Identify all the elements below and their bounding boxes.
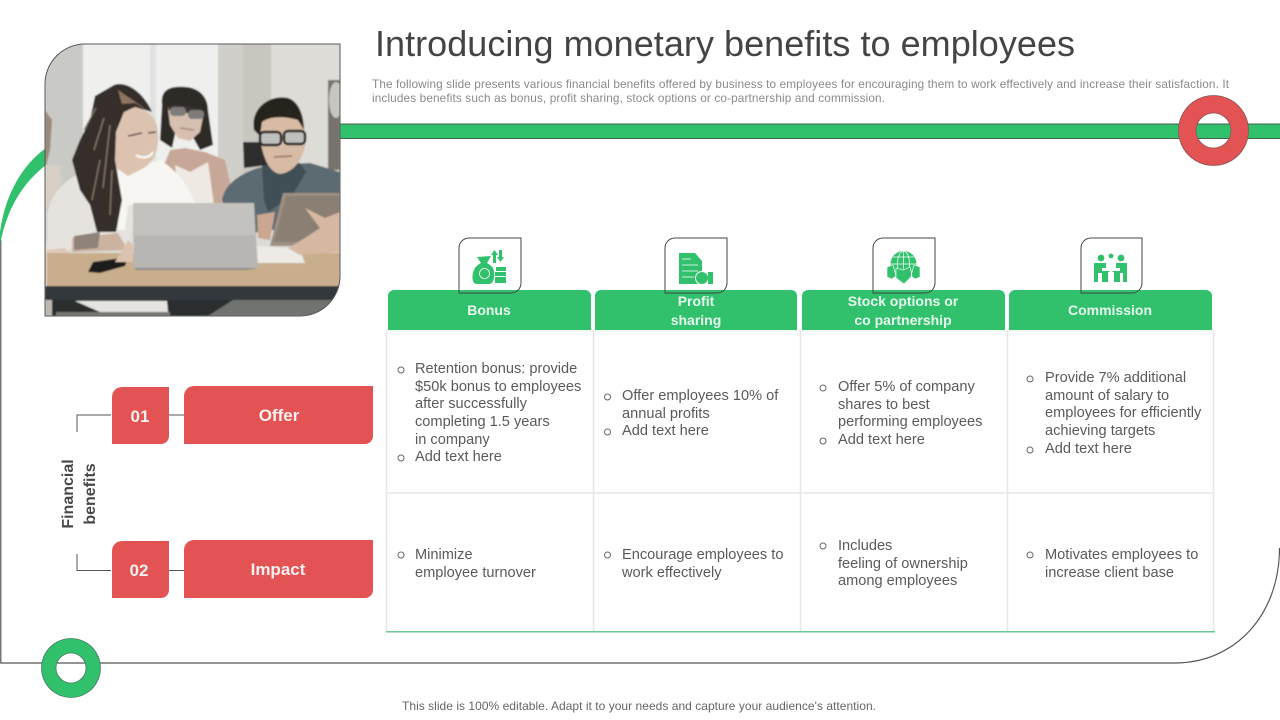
subtitle text: includes benefits such as bonus, profit sharing, stock options or co-partnership and commission.: [372, 91, 885, 105]
green header band: [340, 124, 1280, 138]
cell: bonus offer: [398, 361, 581, 465]
cell: commission impact: [1027, 547, 1198, 581]
background frame outline: [1, 240, 1279, 663]
cell: stock options impact: feeling of ownership: [838, 556, 968, 572]
cell: profit sharing offer: Add text here: [622, 423, 709, 439]
cell: commission offer: amount of salary to: [1045, 388, 1169, 404]
cell: stock options offer: performing employees: [838, 414, 982, 430]
column header: Stock options or co partnership: [802, 290, 1005, 330]
row badge 02: [112, 541, 169, 598]
cell: stock options offer: Offer 5% of company: [838, 379, 976, 395]
cell: stock options impact: [820, 538, 968, 589]
cell: bonus impact: [398, 547, 536, 581]
photo outline: [45, 44, 340, 316]
icon: document with coins: [665, 238, 727, 293]
cell: commission offer: Add text here: [1045, 441, 1132, 457]
cell: stock options impact: Includes: [838, 538, 892, 554]
cell: stock options impact: among employees: [838, 573, 957, 589]
cell: profit sharing impact: [604, 547, 783, 581]
cell: stock options offer: Add text here: [838, 432, 925, 448]
icon: money bag and coins: [459, 238, 521, 293]
cell: stock options offer: [820, 379, 982, 448]
subtitle text: The following slide presents various financial benefits offered by business to employees for encouraging them to work effectively and increase their satisfaction. It: [372, 77, 1230, 91]
row label: Offer: Offer: [259, 406, 300, 425]
icon: globe and handshake: [873, 238, 935, 293]
cell: profit sharing offer: Offer employees 10% of: [622, 388, 779, 404]
photo: team around a laptop: [45, 44, 343, 316]
column header: Stock options or co partnership: Stock options or: [848, 293, 959, 309]
title: Introducing monetary benefits to employees: [375, 23, 1075, 64]
row badge 01: 01: [131, 407, 149, 426]
row label: Impact: [184, 540, 373, 598]
column header: Commission: Commission: [1068, 302, 1152, 318]
cell: bonus offer: Add text here: [415, 449, 502, 465]
cell: profit sharing impact: Encourage employees to: [622, 547, 783, 563]
footer note: This slide is 100% editable. Adapt it to your needs and capture your audience's attention.: [402, 699, 876, 713]
row badge 01: [112, 387, 169, 444]
cell: profit sharing offer: [604, 388, 779, 439]
green ring on frame line: [42, 638, 101, 698]
cell: bonus impact: employee turnover: [415, 565, 536, 581]
vertical label: financial benefits: [60, 459, 99, 529]
red ring on header band: [1179, 96, 1249, 165]
cell: bonus offer: $50k bonus to employees: [415, 379, 581, 395]
vertical label: financial benefits: benefits: [82, 463, 99, 525]
subtitle text: [372, 77, 1230, 105]
cell: bonus offer: in company: [415, 432, 490, 448]
column header: Bonus: [388, 290, 591, 330]
vertical label: financial benefits: Financial: [60, 459, 77, 529]
cell: bonus impact: Minimize: [415, 547, 473, 563]
row label: Offer: [184, 386, 373, 444]
cell: commission impact: Motivates employees to: [1045, 547, 1198, 563]
cell: bonus offer: after successfully: [415, 396, 528, 412]
cell: commission offer: [1027, 370, 1202, 457]
icon: people meeting at a table: [1081, 238, 1142, 293]
row label: Impact: Impact: [251, 560, 306, 579]
row badge 02: 02: [130, 561, 148, 580]
green curved accent: [0, 148, 46, 245]
cell: stock options offer: shares to best: [838, 397, 930, 413]
cell: bonus offer: completing 1.5 years: [415, 414, 550, 430]
column header: Bonus: Bonus: [467, 302, 511, 318]
column header: Profit sharing: sharing: [671, 312, 721, 328]
table grid: [386, 331, 1215, 632]
cell: commission offer: Provide 7% additional: [1045, 370, 1186, 386]
cell: commission impact: increase client base: [1045, 565, 1174, 581]
cell: commission offer: achieving targets: [1045, 423, 1155, 439]
column header: Commission: [1009, 290, 1212, 330]
column header: Profit sharing: [595, 290, 797, 330]
cell: commission offer: employees for efficiently: [1045, 405, 1202, 421]
cell: profit sharing offer: annual profits: [622, 406, 710, 422]
column header: Profit sharing: Profit: [678, 293, 715, 309]
connector lines: [77, 415, 184, 570]
cell: profit sharing impact: work effectively: [621, 565, 722, 581]
column header: Stock options or co partnership: co partnership: [854, 312, 952, 328]
cell: bonus offer: Retention bonus: provide: [415, 361, 577, 377]
